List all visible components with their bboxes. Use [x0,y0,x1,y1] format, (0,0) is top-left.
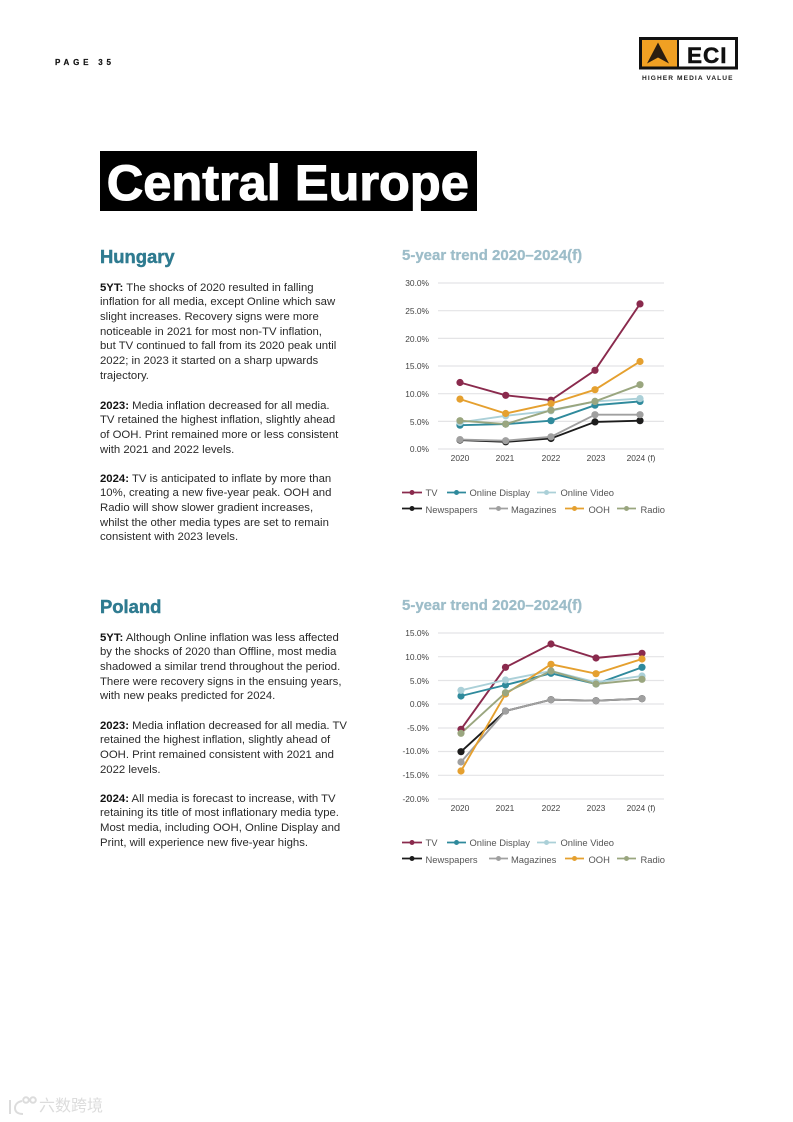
text block: Hungary 2023: 2023: Media inflation decreased for all media. [100,400,330,412]
text block: Hungary 2024 [100,472,331,543]
text block: Poland 5YT: shadowed a similar trend throughout the period. [100,661,340,673]
text block: Hungary 5YT [100,282,336,382]
line chart: Hungary: 25.0% [405,306,430,316]
line chart: Poland: 2022 [542,803,561,813]
text block: Poland 5YT [100,632,342,702]
line chart: Poland: 2020 [451,803,470,813]
text block: Poland 5YT: 5YT: Although Online inflation was less affected [100,632,339,644]
line chart: Hungary: 2022 [542,453,561,463]
text block: Hungary 2023: TV retained the highest inflation, slightly ahead [100,414,335,426]
line chart: Poland: -10.0% [402,746,430,756]
text block: Poland 2023: retained the highest inflation, slightly ahead of [100,734,330,746]
text block: Hungary 5YT: 2022; in 2023 it started on a sharp upwards [100,355,318,367]
text block: Hungary 5YT: 5YT: The shocks of 2020 resulted in falling [100,282,314,294]
text block: Hungary 5YT: noticeable in 2021 for most non-TV inflation, [100,326,322,338]
page number: PAGE 35 [55,58,115,67]
line chart: Hungary: OOH [588,504,610,515]
text block: Hungary 5YT: trajectory. [100,370,149,382]
chart title: Hungary trend: 5-year trend 2020–2024(f) [402,246,582,264]
line chart: Poland: 15.0% [405,628,430,638]
line chart: Hungary: 2023 [587,453,606,463]
text block: Poland 2023 [100,720,347,776]
text block: Hungary 2023 [100,400,338,456]
heading: Poland: Poland [100,596,161,617]
line chart: Poland: TV [426,837,438,848]
line chart: Poland: Magazines [511,854,557,865]
text block: Poland 5YT: There were recovery signs in the ensuing years, [100,676,342,688]
text block: Poland 2024 [100,792,340,849]
line chart: Hungary: 15.0% [405,361,430,371]
text block: Poland 2023: OOH. Print remained consistent with 2021 and [100,749,334,761]
text block: Hungary 2024: whilst the other media types are set to remain [100,517,329,529]
chart title: Poland trend: 5-year trend 2020–2024(f) [402,596,582,614]
text block: Poland 2024: 2024: All media is forecast to increase, with TV [100,792,336,804]
line chart: Hungary: 0.0% [410,444,430,454]
line chart: Hungary: Online Video [560,487,614,498]
line chart: Hungary: 10.0% [405,389,430,399]
line chart: Poland: Online Video [560,837,614,848]
line chart: Poland: -5.0% [407,723,430,733]
line chart: Hungary: Magazines [511,504,557,515]
line chart: Hungary: 2024 (f) [627,453,656,463]
line chart: Hungary: Radio [640,504,665,515]
line chart: Hungary: TV [426,487,438,498]
text block: Hungary 2024: Radio will show slower gradient increases, [100,502,313,514]
line chart: Poland: 5.0% [410,676,430,686]
text block: Hungary 5YT: inflation for all media, except Online which saw [100,296,335,308]
text block: Poland 5YT: by the shocks of 2020 than Offline, most media [100,646,336,658]
line chart: Hungary: Newspapers [426,504,478,515]
line chart: Poland: Radio [640,854,665,865]
line chart: Hungary: 2020 [451,453,470,463]
text block: Poland 2024: Print, will experience new five-year highs. [100,837,308,849]
title: Central Europe: Central Europe [107,154,469,211]
line chart: Poland: 2023 [587,803,606,813]
line chart: Poland: OOH [588,854,610,865]
line chart: Hungary: 2021 [496,453,515,463]
logo: ECI [639,37,738,82]
line chart: Poland: -20.0% [402,794,430,804]
text block: Poland 2024: Most media, including OOH, Online Display and [100,822,340,834]
line chart: Hungary: 30.0% [405,278,430,288]
watermark [9,1096,103,1115]
line chart: Poland: Online Display [470,837,530,848]
line chart: Hungary: Online Display [470,487,530,498]
line chart: Hungary [402,278,665,515]
logo: ECI: HIGHER MEDIA VALUE [642,75,734,82]
text block: Poland 2023: 2023: Media inflation decreased for all media. TV [100,720,347,732]
heading: Hungary: Hungary [100,246,175,267]
text block: Hungary 5YT: but TV continued to fall from its 2020 peak until [100,340,336,352]
text block: Hungary 5YT: slight increases. Recovery signs were more [100,311,319,323]
text block: Hungary 2024: 10%, creating a new five-year peak. OOH and [100,487,331,499]
text block: Hungary 2023: of OOH. Print remained more or less consistent [100,429,338,441]
text block: Poland 5YT: with new peaks predicted for 2024. [100,690,275,702]
logo: ECI: ECI [687,43,728,68]
line chart: Poland: Newspapers [426,854,478,865]
text block: Poland 2023: 2022 levels. [100,764,161,776]
text block: Hungary 2023: with 2021 and 2022 levels. [100,444,234,456]
watermark: 六数跨境 [39,1098,103,1115]
text block: Hungary 2024: consistent with 2023 levels. [100,531,238,543]
line chart: Poland: 0.0% [410,699,430,709]
line chart: Poland: 2021 [496,803,515,813]
line chart: Poland [402,628,665,865]
line chart: Poland: 10.0% [405,652,430,662]
line chart: Poland: -15.0% [402,770,430,780]
line chart: Hungary: 20.0% [405,334,430,344]
line chart: Poland: 2024 (f) [627,803,656,813]
text block: Hungary 2024: 2024: TV is anticipated to inflate by more than [100,472,331,484]
line chart: Hungary: 5.0% [410,417,430,427]
text block: Poland 2024: retaining its title of most inflationary media type. [100,807,339,819]
